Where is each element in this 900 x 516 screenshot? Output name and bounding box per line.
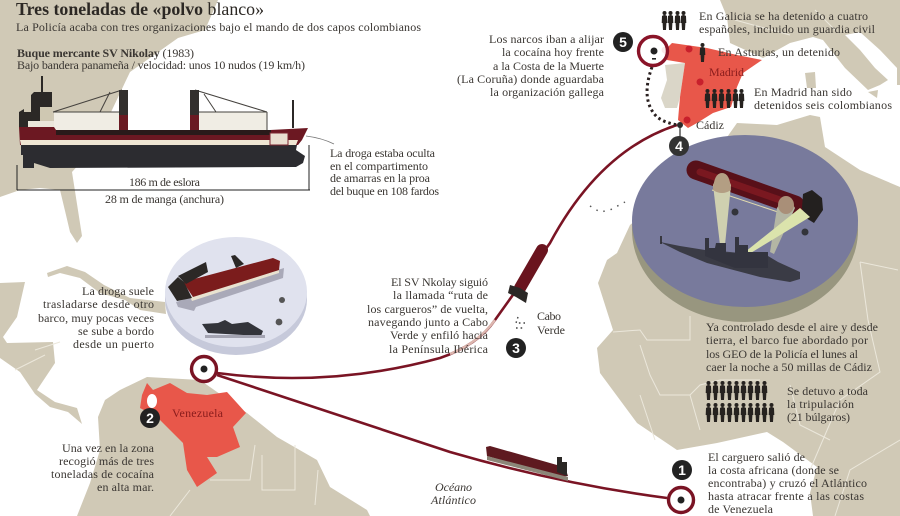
step badge 1 [672,460,692,480]
text: step 4: tierra, el barco fue abordado por [706,333,868,347]
text: step 3: los cargueros” de vuelta, [367,302,488,316]
text: step 1: hasta atracar frente a las costas [708,489,864,503]
disk side [632,138,858,322]
map: Venezuela highlighted [140,383,246,487]
disk: boarding operation [632,135,858,322]
text: Galicia: españoles, incluido un guardia civil [699,22,876,36]
text: step 4: caer la noche a 50 millas de Cádiz [706,360,872,374]
step badge 5: 5 [619,34,627,50]
ship flag and speed: Bajo bandera panameña / velocidad: unos 10 nudos (19 km/h) [17,58,305,72]
text: step 3: navegando junto a Cabo [368,315,488,329]
step badge 4 [669,136,689,156]
cargo ship hull [183,258,280,297]
text: step 5 [457,32,605,99]
step badge 5 [613,32,633,52]
text: Galicia [699,9,876,36]
land: Sicily [868,90,878,98]
text: step 4: los GEO de la Policía el lunes al [706,347,859,361]
disk: transfer at sea [165,237,307,355]
text: Madrid [754,85,892,112]
land: Europe [720,0,900,90]
marker: Cádiz point [677,122,683,140]
Venezuela shape [140,383,246,487]
text: step 3: El SV Nkolay siguió [391,275,488,289]
drug hiding text: de amarras en la proa [330,171,431,185]
text: step 2: recogió más de tres [59,454,154,468]
Cabo Verde label [537,309,565,337]
label: Atlantic Ocean: Atlántico [430,493,476,507]
marker: ring at Galicia [638,36,668,66]
text: crew [787,384,869,424]
map: Spain highlighted [662,43,762,128]
hull cream band [20,140,298,145]
drug hiding text: en el compartimento [330,159,428,173]
marker: ring at Africa [668,488,694,512]
text: step 4: Ya controlado desde el aire y desde [706,320,878,334]
crane posts [119,90,128,115]
islands: Canary [590,202,625,212]
text: transfer at sea: barco, muy pocas veces [38,311,154,325]
text: crew: la tripulación [787,397,854,411]
text: step 1: El carguero salió de [708,450,805,464]
forward mast [292,100,294,128]
step badge 3: 3 [512,340,520,356]
patrol boat bow mast [660,236,662,244]
ship name: Buque mercante SV Nikolay (1983) [17,46,194,60]
deck panels [54,112,267,130]
waterline band [487,456,568,481]
text: step 2: en alta mar. [97,480,154,494]
deck dark strip [56,130,271,135]
disk top [632,135,858,307]
cargo ship shadow [176,268,284,311]
hull [520,250,542,288]
text: Asturias: En Asturias, un detenido [718,45,840,59]
text: step 1: la costa africana (donde se [708,463,839,477]
route: Venezuela to Cádiz [217,125,677,378]
text: crew: Se detuvo a toda [787,384,869,398]
Venezuela label: Venezuela [172,406,224,420]
marker: ring at Caribbean [192,356,216,382]
step badge 2: 2 [146,410,154,426]
land: Portugal [661,63,685,108]
beam label: 28 m de manga (anchura) [105,192,224,206]
searchlight beam 1 [713,175,731,245]
stern tower [557,457,567,476]
step badge 3 [506,338,526,358]
text: step 5: la cocaína hoy frente [502,45,604,59]
patrol boat [660,242,800,282]
ship on route, south Atlantic [486,446,568,481]
beam 1 warm spot [713,173,731,193]
text: step 1 [708,450,867,516]
text: step 1: de Venezuela [708,502,774,516]
hull black [21,145,305,168]
small vessel 2 [802,228,808,236]
small dark vessel [202,320,263,336]
step badge 1: 1 [678,462,686,478]
Lake Maracaibo [147,394,157,408]
dimension lines [17,145,310,190]
text: step 2: Una vez en la zona [62,441,155,455]
step badge 2 [140,408,160,428]
route: Africa to Venezuela [217,375,667,498]
drug hiding text: La droga estaba oculta [330,146,436,160]
text: transfer at sea: trasladarse desde otro [43,297,154,311]
text: step 3: Verde y enfiló hacia [390,328,489,342]
text: step 1: encontraba) y cruzó el Atlántico [708,476,867,490]
text: step 2: toneladas de cocaína [51,467,155,481]
detainees: Galicia [662,11,686,30]
detainee: Asturias [700,43,705,62]
label: Atlantic Ocean: Océano [435,480,472,494]
red ship hull [696,170,795,205]
drug hiding text [330,146,439,198]
ship profile illustration [19,76,308,168]
text: step 5: (La Coruña) donde aguardaba [457,72,605,86]
text: step 3: la llamada “ruta de [393,288,488,302]
searchlight beam 3 [745,208,810,254]
small boats [279,297,285,303]
Cabo Verde label: Verde [537,323,565,337]
detainees: crew [706,381,774,422]
land: Sardinia [805,72,816,88]
islands: Cabo Verde [516,317,525,328]
superstructure [19,76,52,127]
text: crew: (21 búlgaros) [787,410,850,424]
text: step 5: la organización gallega [490,85,605,99]
subtitle: La Policía acaba con tres organizaciones bajo el mando de dos capos colombianos [16,20,421,34]
patrol boat superstructure [705,237,768,268]
text: step 5: a la Costa de la Muerte [493,59,604,73]
crane lines [53,90,267,130]
ship stern [802,190,823,223]
Cádiz label: Cádiz [696,118,724,132]
cargo ship stern and cranes [168,255,244,301]
step badge 4: 4 [675,138,683,154]
drug hiding text: del buque en 108 fardos [330,184,439,198]
leader line to bow [306,136,334,144]
Cabo Verde label: Cabo [537,309,561,323]
Spain shape [663,43,762,128]
length label: 186 m de eslora [129,175,201,189]
ship waterline [712,190,787,215]
beam 2 warm spot [778,196,794,214]
label: Atlantic Ocean [430,480,476,507]
Madrid label: Madrid [709,65,744,79]
city dots in Spain [662,46,704,123]
text: Madrid: En Madrid han sido [754,85,852,99]
land: Africa [597,115,900,516]
text: step 3: la Península Ibérica [389,342,489,356]
bow mooring compartment [270,133,288,145]
text: step 5: Los narcos iban a alijar [489,32,604,46]
detainees: Madrid [705,89,744,108]
text: Madrid: detenidos seis colombianos [754,98,892,112]
text: transfer at sea [38,284,154,351]
text: transfer at sea: desde un puerto [73,337,154,351]
land: South America [77,377,370,516]
red ship inner deck [700,172,780,200]
hull red band [19,127,308,145]
faded route section behind text [450,320,495,354]
land: Cuba and Hispaniola [47,266,166,314]
small vessel 1 [732,208,738,216]
land: North America [0,0,218,243]
ship on route, mid Atlantic [508,250,542,303]
route: dotted to Galicia [647,67,678,125]
cargo ship deck line [190,270,279,301]
hull [486,446,568,477]
disk top [165,237,307,347]
text: transfer at sea: La droga suele [82,284,154,298]
text: transfer at sea: se sube a bordo [78,324,154,338]
disk side [165,243,307,355]
stern [508,285,528,303]
text: step 3 [367,275,489,356]
searchlight beam 2 [770,200,795,254]
land: Central America [0,282,82,424]
text: step 4 [706,320,878,374]
text: Galicia: En Galicia se ha detenido a cuatro [699,9,868,23]
text: step 2 [51,441,155,494]
